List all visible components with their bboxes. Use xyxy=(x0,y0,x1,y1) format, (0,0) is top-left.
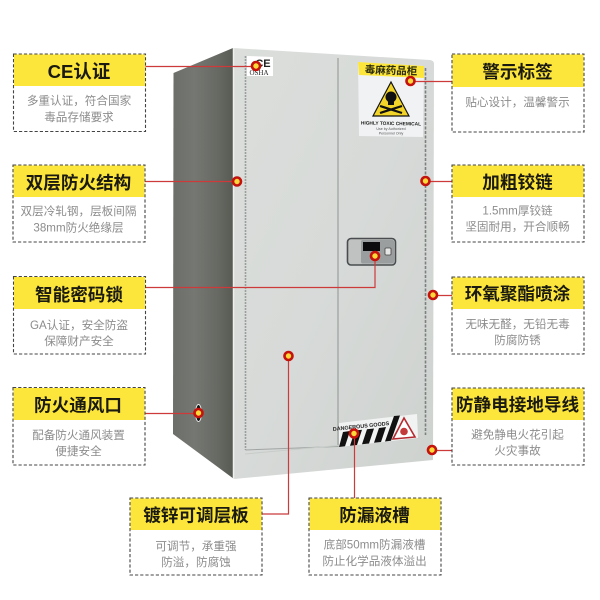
text block: 多重认证，符合国家 xyxy=(27,94,132,108)
panel: 智能密码锁 xyxy=(14,276,146,354)
panel: 加粗铰链: 坚固耐用，开合顺畅 xyxy=(465,220,570,234)
panel: 环氧聚酯喷涂 xyxy=(452,277,584,354)
panel: 防静电接地导线: 火灾事故 xyxy=(494,444,541,458)
heading: 防漏液槽 xyxy=(339,506,410,526)
panel: 防火通风口 xyxy=(13,388,145,465)
cabinet side panel xyxy=(173,48,234,479)
text block: 可调节，承重强 xyxy=(155,539,237,553)
warning label: 毒麻药品柜 xyxy=(365,63,418,78)
warning label: Personnel Only xyxy=(379,132,403,136)
connector lines xyxy=(145,66,452,514)
panel: 防静电接地导线 xyxy=(452,388,584,465)
heading: 双层防火结构 xyxy=(26,173,131,193)
text block: 贴心设计，温馨警示 xyxy=(465,95,570,109)
text block: 双层冷轧钢，层板间隔 xyxy=(21,204,137,218)
hazard triangle xyxy=(373,82,409,116)
dangerous goods sticker xyxy=(333,414,418,447)
dangerous goods sticker: DANGEROUS GOODS xyxy=(333,421,390,433)
panel: 警示标签 xyxy=(452,54,584,132)
text block: 避免静电火花引起 xyxy=(471,428,564,442)
CE OSHA label xyxy=(247,56,273,77)
panel: 防漏液槽: 防止化学品液体溢出 xyxy=(322,554,427,568)
panel: 双层防火结构 xyxy=(13,165,145,242)
text block: GA认证，安全防盗 xyxy=(30,318,128,332)
CE OSHA label: OSHA xyxy=(249,69,269,77)
heading: 防火通风口 xyxy=(34,396,122,416)
panel: 防漏液槽 xyxy=(309,498,441,575)
text block: 1.5mm厚铰链 xyxy=(482,204,553,218)
panel: 环氧聚酯喷涂: 防腐防锈 xyxy=(494,333,541,347)
panel: 防火通风口: 便捷安全 xyxy=(55,444,102,458)
panel: 镀锌可调层板: 防溢，防腐蚀 xyxy=(161,555,231,569)
warning label xyxy=(358,62,424,137)
heading: 镀锌可调层板 xyxy=(143,506,249,526)
heading: 警示标签 xyxy=(482,62,553,82)
heading: 环氧聚酯喷涂 xyxy=(465,284,571,304)
panel: 智能密码锁: 保障财产安全 xyxy=(44,334,114,348)
side vent xyxy=(196,404,202,422)
text block: 配备防火通风装置 xyxy=(32,428,125,442)
marker dots xyxy=(194,62,437,454)
panel: 加粗铰链 xyxy=(452,165,584,242)
heading: 智能密码锁 xyxy=(35,285,123,305)
text block: 无味无醛，无铅无毒 xyxy=(465,317,570,331)
text block: 底部50mm防漏液槽 xyxy=(324,538,426,552)
CE OSHA label: CE xyxy=(255,58,271,70)
warning label: HIGHLY TOXIC CHEMICAL xyxy=(361,120,421,128)
heading: 防静电接地导线 xyxy=(456,395,579,415)
heading: 加粗铰链 xyxy=(482,172,553,192)
warning label: Use by Authorized xyxy=(376,127,406,131)
panel: CE认证: 毒品存储要求 xyxy=(44,110,114,124)
heading: CE认证 xyxy=(48,61,110,82)
panel: CE认证 xyxy=(14,54,146,132)
electronic lock xyxy=(348,238,396,265)
cabinet xyxy=(173,48,434,479)
cabinet front xyxy=(233,48,434,479)
flammable triangle xyxy=(393,418,415,439)
door details xyxy=(234,48,426,479)
panel: 双层防火结构: 38mm防火绝缘层 xyxy=(33,220,124,234)
panel: 镀锌可调层板 xyxy=(130,498,262,575)
